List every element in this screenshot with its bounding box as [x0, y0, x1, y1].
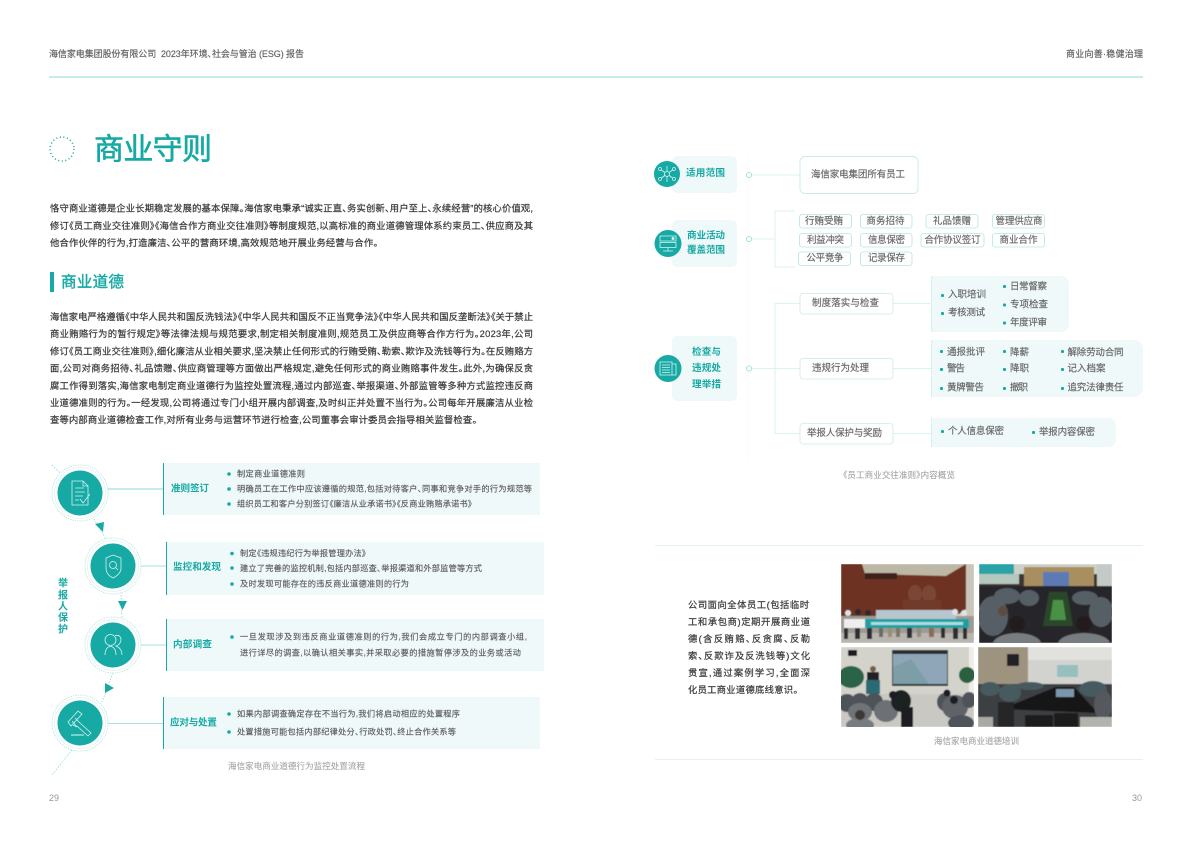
- icon: dotted circle: [50, 137, 74, 161]
- panel: 举报人保护 items: 举报内容保密: [1039, 426, 1095, 438]
- panel: 违规处理 items: 记入档案: [1068, 362, 1106, 374]
- label: 举报人保护: 护: [58, 622, 68, 636]
- intro text block: 恪守商业道德是企业长期稳定发展的基本保障。海信家电秉承“诚实正直、务实创新、用户至上、永续经营”的核心价值观,: [50, 202, 533, 214]
- body text block: [50, 311, 533, 425]
- intro text block: 修订《员工商业交往准则》《海信合作方商业交往准则》等制度规范,以高标准的商业道德管理体系约束员工、供应商及其: [50, 220, 533, 231]
- panel: 违规处理 items: 降薪: [1010, 346, 1029, 358]
- step 1: 准则签订: 制定商业道德准则: [237, 468, 305, 478]
- page number 30: 30: [1132, 793, 1142, 803]
- panel: 制度落实 items: 考核测试: [948, 306, 985, 318]
- panel: 违规处理 items: 降职: [1010, 362, 1029, 374]
- panel: 制度落实 items: 年度评审: [1010, 316, 1047, 328]
- training text block: 索、反欺诈及反洗钱等)文化: [688, 650, 810, 661]
- tags: business activities: 商业合作: [1000, 234, 1038, 246]
- training text block: 贯宣,通过案例学习,全面深: [688, 667, 810, 678]
- icon: people: [85, 617, 141, 673]
- step 4: 应对与处置: 如果内部调查确定存在不当行为,我们将启动相应的处置程序: [237, 708, 460, 718]
- panel: 举报人保护 items: [931, 418, 1116, 447]
- step 2: 监控和发现: 及时发现可能存在的违反商业道德准则的行为: [240, 578, 409, 588]
- tags: business activities: [798, 214, 1044, 266]
- panel: 违规处理 items: 撤职: [1010, 382, 1028, 394]
- body text block: 查等内部商业道德检查工作,对所有业务与运营环节进行检查,公司董事会审计委员会指导相关监督检查。: [50, 414, 477, 425]
- tags: business activities: 信息保密: [868, 234, 905, 246]
- step 3: 内部调查: 进行详尽的调查,以确认相关事实,并采取必要的措施暂停涉及的业务或活动: [240, 648, 521, 658]
- panel: 制度落实 items: 入职培训: [948, 288, 986, 300]
- photo: lecture with projector: [841, 647, 974, 727]
- icon: book: [654, 355, 682, 382]
- arrow: step 1 to 2: [95, 522, 104, 532]
- body text block: 海信家电严格遵循《中华人民共和国反洗钱法》《中华人民共和国反不正当竞争法》《中华人民共和国反垄断法》《关于禁止: [50, 311, 533, 322]
- tags: business activities: 礼品馈赠: [933, 215, 971, 227]
- box: 所有员工: [800, 156, 918, 194]
- icon: server: [654, 230, 682, 257]
- header: report title: 海信家电集团股份有限公司 2023年环境、社会与管治 (ESG) 报告: [49, 48, 304, 59]
- body text block: 修订《员工商业交往准则》,细化廉洁从业相关要求,坚决禁止任何形式的行贿受贿、勒索、欺诈及洗钱等行为。在反贿赂方: [50, 346, 533, 356]
- tags: business activities: 记录保存: [868, 252, 905, 264]
- label: 举报人保护: 人: [58, 600, 68, 612]
- tags: business activities: 商务招待: [866, 215, 905, 227]
- box: 举报人保护与奖励: [800, 424, 893, 444]
- box: 制度落实与检查: 制度落实与检查: [812, 297, 879, 309]
- panel: 举报人保护 items: 个人信息保密: [948, 425, 1004, 437]
- node: 商业活动覆盖范围: [654, 220, 737, 267]
- step 1: 准则签订: [52, 463, 540, 521]
- node: 商业活动覆盖范围: 覆盖范围: [687, 244, 725, 256]
- panel: 违规处理 items: 通报批评: [947, 346, 985, 358]
- step 1: 准则签订: 明确员工在工作中应该遵循的规范,包括对待客户、同事和竞争对手的行为规范等: [237, 484, 532, 494]
- icon: network: [654, 161, 680, 187]
- heading: 商业道德: 商业道德: [61, 273, 124, 291]
- icon: document: [52, 465, 108, 521]
- panel: 制度落实 items: 专项检查: [1010, 298, 1048, 310]
- photo: meeting room with table: [979, 564, 1112, 643]
- step 4: 应对与处置: 应对与处置: [170, 716, 217, 728]
- label: 举报人保护: 报: [58, 588, 68, 602]
- step 2: 监控和发现: [85, 538, 544, 595]
- node: 检查与违规处理举措: 理举措: [692, 378, 721, 390]
- node: 检查与违规处理举措: 检查与: [692, 346, 721, 358]
- training text block: [688, 599, 810, 695]
- step 4: 应对与处置: [52, 695, 540, 751]
- label: 举报人保护: 举: [58, 576, 68, 590]
- training text block: 德(含反贿赂、反贪腐、反勒: [688, 633, 810, 644]
- step 2: 监控和发现: 制定《违规违纪行为举报管理办法》: [240, 548, 366, 558]
- intro text block: [50, 202, 533, 248]
- box: 违规行为处理: [800, 358, 893, 379]
- box: 所有员工: 海信家电集团所有员工: [811, 168, 905, 180]
- tags: business activities: 合作协议签订: [924, 234, 981, 246]
- label: 举报人保护: 保: [58, 611, 68, 624]
- body text block: 面,公司对商务招待、礼品馈赠、供应商管理等方面做出严格规定,避免任何形式的商业贿赂事件发生。此外,为确保反贪: [50, 362, 533, 374]
- box: 制度落实与检查: [800, 294, 893, 314]
- panel: 违规处理 items: [931, 340, 1143, 397]
- step 1: 准则签订: 组织员工和客户分别签订《廉洁从业承诺书》《反商业贿赂承诺书》: [237, 498, 472, 508]
- tags: business activities: 行贿受贿: [805, 215, 843, 227]
- tags: business activities: 利益冲突: [807, 234, 844, 246]
- flow: dotted connectors: [52, 465, 122, 775]
- body text block: 业道德准则的行为。一经发现,公司将通过专门小组开展内部调查,及时纠正并处置不当行为。公司每年开展廉洁从业检: [50, 397, 533, 408]
- training text block: 公司面向全体员工(包括临时: [688, 599, 809, 610]
- step 3: 内部调查: 内部调查: [173, 638, 212, 650]
- panel: 违规处理 items: 追究法律责任: [1068, 382, 1124, 394]
- box: 违规行为处理: 违规行为处理: [812, 362, 869, 374]
- step 4: 应对与处置: 处置措施可能包括内部纪律处分、行政处罚、终止合作关系等: [237, 726, 456, 736]
- node: 适用范围: [654, 156, 737, 193]
- step 3: 内部调查: [85, 617, 544, 673]
- panel: 违规处理 items: 解除劳动合同: [1068, 346, 1124, 358]
- training text block: 工和承包商)定期开展商业道: [688, 616, 810, 627]
- mind map: connectors: [746, 156, 931, 460]
- box: 举报人保护与奖励: 举报人保护与奖励: [807, 427, 882, 439]
- node: 适用范围: 适用范围: [686, 167, 725, 179]
- icon: gavel: [52, 695, 108, 751]
- step 1: 准则签订: 准则签订: [171, 482, 209, 494]
- panel: 违规处理 items: 黄牌警告: [947, 382, 984, 394]
- step 3: 内部调查: 一旦发现涉及到违反商业道德准则的行为,我们会成立专门的内部调查小组,: [240, 632, 527, 642]
- caption: flow: 海信家电商业道德行为监控处置流程: [228, 761, 365, 771]
- step 2: 监控和发现: 监控和发现: [173, 561, 221, 573]
- body text block: 商业贿赂行为的暂行规定》等法律法规与规范要求,制定相关制度准则,规范员工及供应商等合作方行为。2023年,公司: [50, 328, 533, 339]
- arrow: step 2 to 3: [118, 601, 127, 610]
- panel: 违规处理 items: 警告: [947, 362, 965, 374]
- intro text block: 他合作伙伴的行为,打造廉洁、公平的营商环境,高效规范地开展业务经营与合作。: [50, 237, 378, 248]
- page number 29: 29: [49, 793, 59, 803]
- caption: training photos: 海信家电商业道德培训: [934, 736, 1019, 746]
- title: 商业守则: [94, 134, 212, 166]
- tags: business activities: 公平竞争: [806, 252, 844, 264]
- panel: 制度落实 items: 日常督察: [1010, 280, 1047, 292]
- training text block: 化员工商业道德底线意识。: [688, 684, 798, 695]
- node: 检查与违规处理举措: [654, 336, 737, 401]
- node: 检查与违规处理举措: 违规处: [692, 362, 721, 374]
- step 2: 监控和发现: 建立了完善的监控机制,包括内部巡查、举报渠道和外部监管等方式: [240, 563, 482, 573]
- caption: mind map: 《员工商业交往准则》内容概览: [843, 470, 955, 480]
- tags: business activities: 管理供应商: [996, 215, 1042, 227]
- photo: group outdoors with banner: [841, 564, 974, 643]
- photo: conference room with long table: [978, 647, 1112, 727]
- label: 举报人保护: [58, 576, 68, 636]
- body text block: 腐工作得到落实,海信家电制定商业道德行为监控处置流程,通过内部巡查、举报渠道、外部监管等多种方式监控违反商: [50, 380, 533, 391]
- node: 商业活动覆盖范围: 商业活动: [687, 230, 725, 242]
- panel: 制度落实 items: [931, 276, 1069, 332]
- icon: shield: [85, 538, 141, 594]
- header: section name: 商业向善·稳健治理: [1066, 48, 1143, 59]
- arrow: step 3 to 4: [105, 683, 114, 693]
